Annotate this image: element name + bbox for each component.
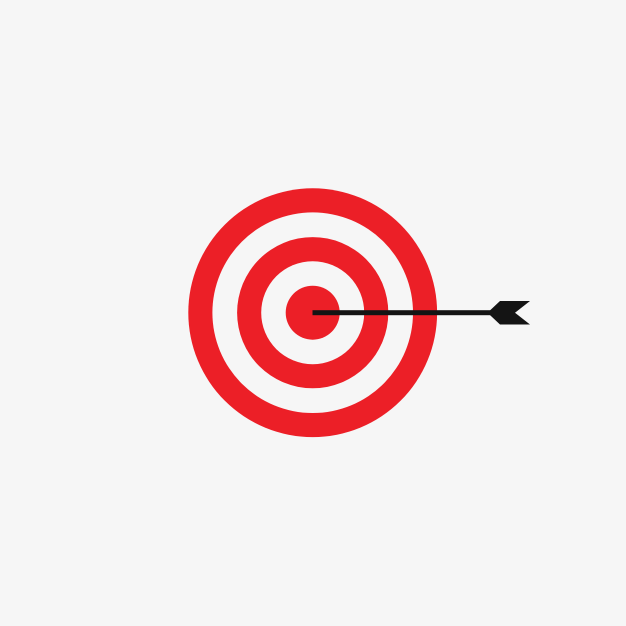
icon: arrow <box>312 301 530 324</box>
icon: bullseye target <box>188 188 437 437</box>
